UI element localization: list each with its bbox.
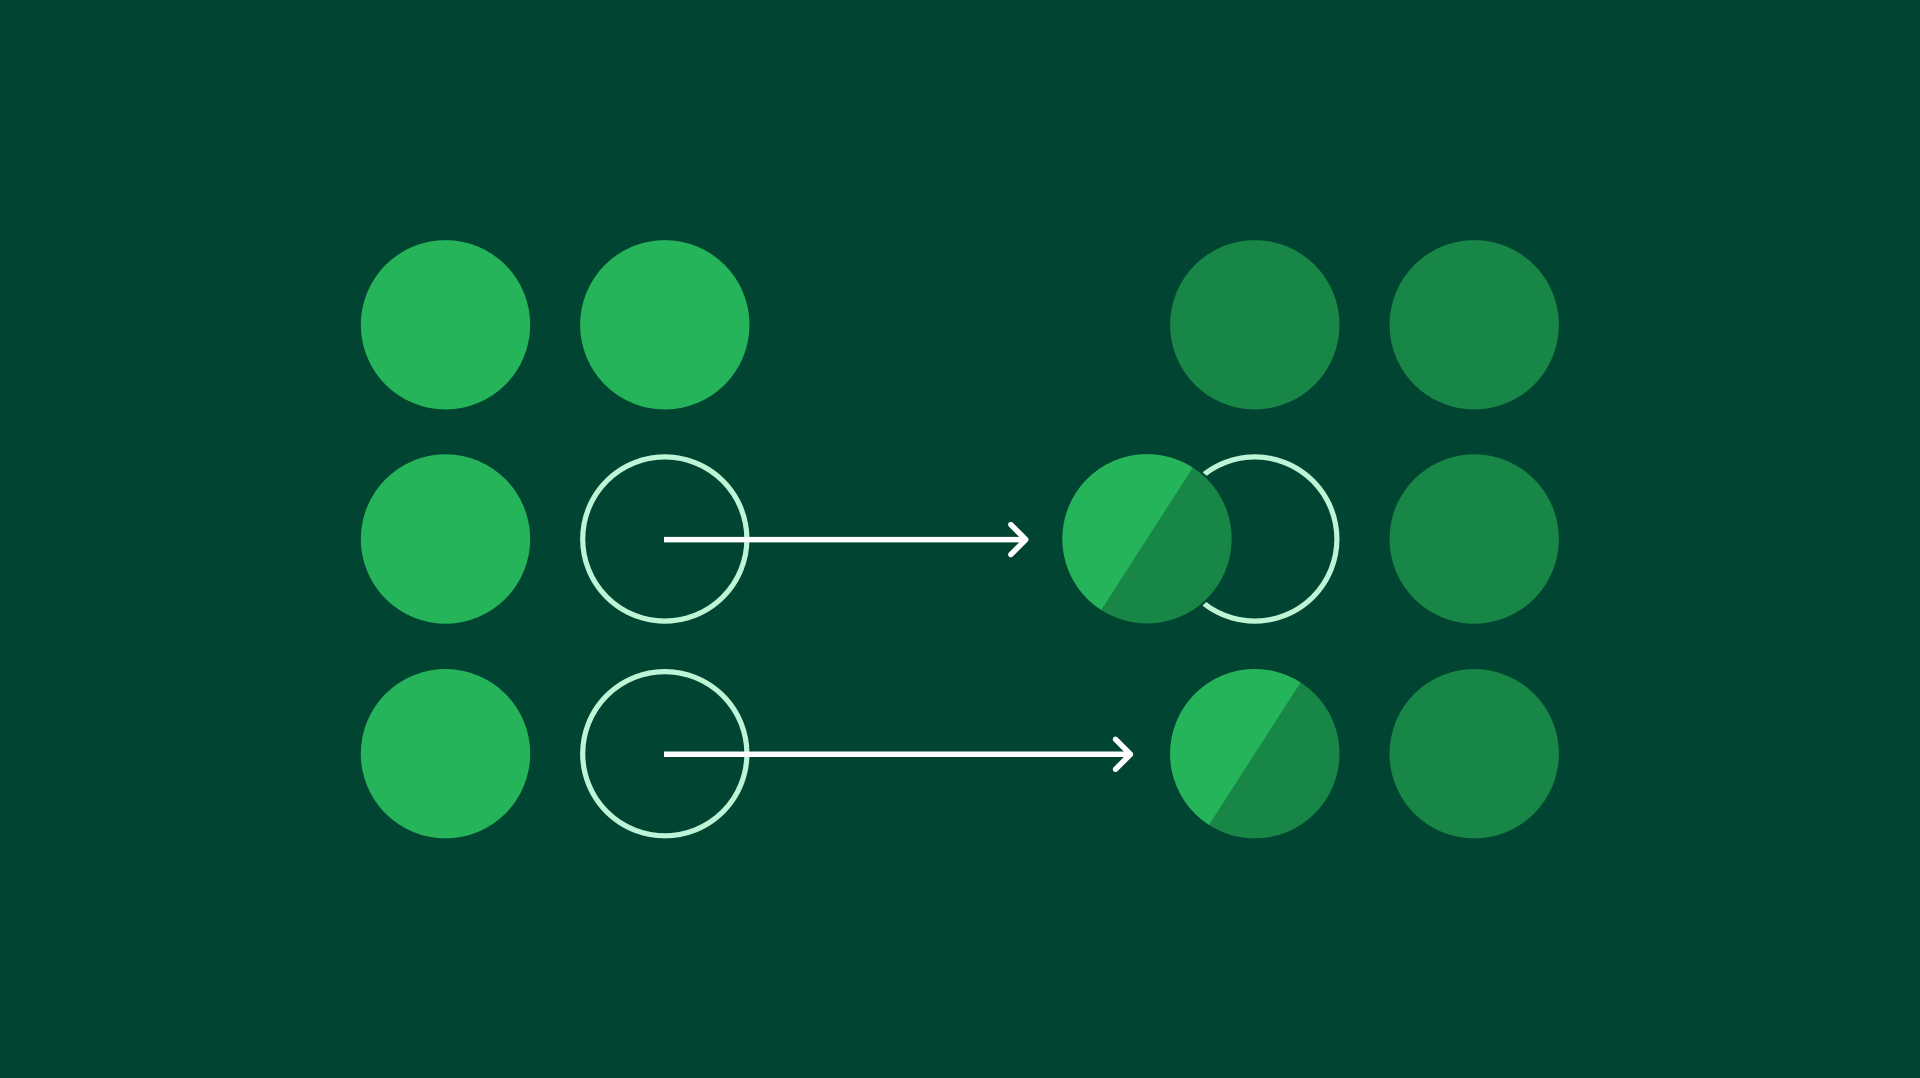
- right group: dark green circles: [1170, 240, 1559, 838]
- arrow: upper, moving to overlapping circle: [664, 525, 1026, 555]
- left group: vacated outline circles: [583, 457, 747, 836]
- two-tone circle: in transit, overlapping outline: [1060, 452, 1234, 626]
- left group: bright green circles: [361, 240, 750, 838]
- arrow: lower, moving to two-tone circle: [664, 739, 1130, 769]
- two-tone circle: arrived: [1170, 669, 1340, 838]
- right group: outline circle slot: [1173, 457, 1337, 621]
